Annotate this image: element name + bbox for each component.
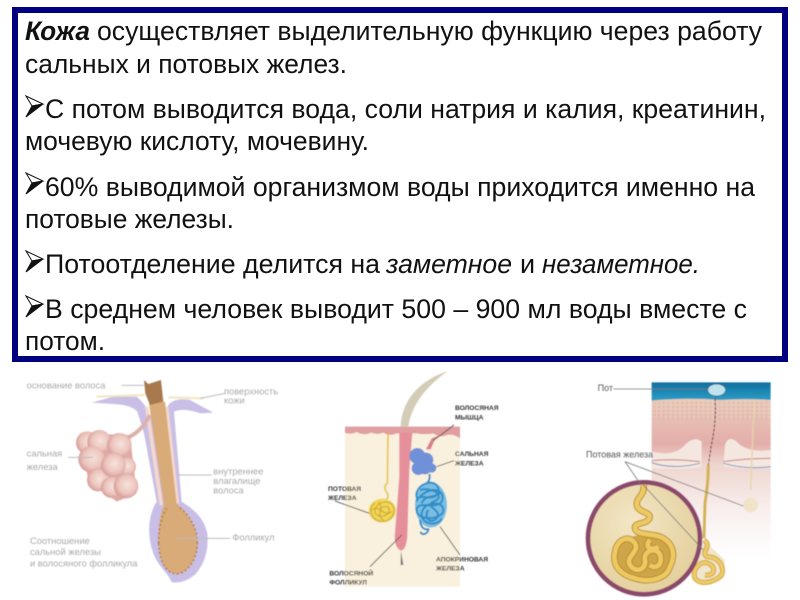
labels: ФОЛЛИКУЛ <box>329 580 367 587</box>
faint second gland <box>743 403 758 512</box>
skin layer <box>345 427 460 438</box>
labels: ЖЕЛЕЗА <box>435 566 465 573</box>
labels: АПОКРИНОВАЯ <box>436 557 488 564</box>
labels: ПОТОВАЯ <box>328 486 361 493</box>
bullet: sweat contents <box>25 94 766 156</box>
bullet: 60 percent of water: потовые железы. <box>25 204 234 234</box>
labels: поверхность <box>224 386 278 396</box>
hair muscle <box>426 435 440 449</box>
leader lines <box>68 385 230 538</box>
hair root tip <box>144 380 163 405</box>
bullet: types of perspiration: и <box>520 249 535 279</box>
fat lobes <box>652 439 771 469</box>
labels: влагалище <box>213 476 260 486</box>
small gland coil <box>693 540 725 583</box>
bullet: 60 percent of water: 60% выводимой организмом воды приходится именно на <box>45 172 756 202</box>
labels: внутреннее <box>213 466 263 476</box>
magnifier lens <box>588 482 700 594</box>
labels: ВОЛОСЯНОЙ <box>329 568 373 577</box>
bullet: average sweat volume: В среднем человек выводит 500 – 900 мл воды вместе с <box>45 294 747 324</box>
labels <box>27 380 278 569</box>
diagram: sweat gland in skin <box>586 382 771 594</box>
bullet: average sweat volume: потом. <box>25 326 105 356</box>
pale inner band <box>147 407 177 505</box>
magnified gland coil <box>614 485 673 580</box>
diagram: skin glands cross-section <box>327 371 499 587</box>
hair <box>401 371 447 427</box>
dermis background <box>345 427 460 587</box>
intro paragraph: сальных и потовых желез. <box>25 49 347 79</box>
sweat gland duct and coil <box>369 434 396 523</box>
hair root <box>401 551 403 565</box>
labels: ЖЕЛЕЗА <box>327 495 357 502</box>
sweat duct <box>708 398 715 465</box>
labels: кожи <box>224 395 245 405</box>
labels: ВОЛОСЯНАЯ <box>455 405 499 412</box>
bullet: sweat contents: мочевую кислоту, мочевину. <box>25 126 369 156</box>
sebaceous gland lobes <box>76 430 138 502</box>
labels <box>327 405 499 587</box>
labels: волоса <box>213 485 245 495</box>
hair shaft and bulb <box>149 402 197 574</box>
text panel <box>15 10 785 359</box>
bullet: types of perspiration: заметное <box>385 249 512 279</box>
apocrine gland coil <box>415 474 447 534</box>
intro paragraph: осуществляет выделительную функцию через работу <box>97 16 762 46</box>
bullet: sweat contents: С потом выводится вода, соли натрия и калия, креатинин, <box>45 94 766 124</box>
bullet: types of perspiration: Потоотделение делится на <box>45 249 381 279</box>
speckled epidermis <box>652 400 771 420</box>
bullet: average sweat volume <box>25 294 747 356</box>
labels: и волосяного фолликула <box>30 559 138 569</box>
labels: САЛЬНАЯ <box>455 451 489 458</box>
labels: Пот <box>598 383 613 393</box>
sweat drop <box>708 384 726 396</box>
bullet: types of perspiration <box>26 249 700 279</box>
blood vessels <box>652 458 771 462</box>
labels: железа <box>27 462 58 472</box>
intro paragraph: Кожа <box>25 16 90 46</box>
follicle sheath <box>92 397 213 583</box>
leader lines <box>335 425 460 567</box>
labels: Соотношение <box>30 536 90 546</box>
sebaceous gland <box>409 448 436 475</box>
labels: сальной железы <box>30 547 101 557</box>
bullet: 60 percent of water <box>25 172 756 234</box>
labels: МЫШЦА <box>455 414 484 421</box>
diagram: sebaceous gland and hair follicle <box>27 380 278 583</box>
labels: основание волоса <box>27 380 106 390</box>
leader lines <box>613 389 743 550</box>
skin surface <box>97 395 203 398</box>
sky/surface <box>652 382 771 401</box>
intro paragraph <box>25 16 762 79</box>
duct <box>127 415 150 438</box>
labels: Фолликул <box>232 533 275 543</box>
labels: сальная <box>27 449 62 459</box>
labels <box>586 383 653 460</box>
labels: ЖЕЛЕЗА <box>454 460 484 467</box>
hair follicle <box>395 433 412 551</box>
skin block <box>652 398 771 558</box>
bullet: types of perspiration: незаметное. <box>542 249 700 279</box>
labels: Потовая железа <box>586 450 653 460</box>
